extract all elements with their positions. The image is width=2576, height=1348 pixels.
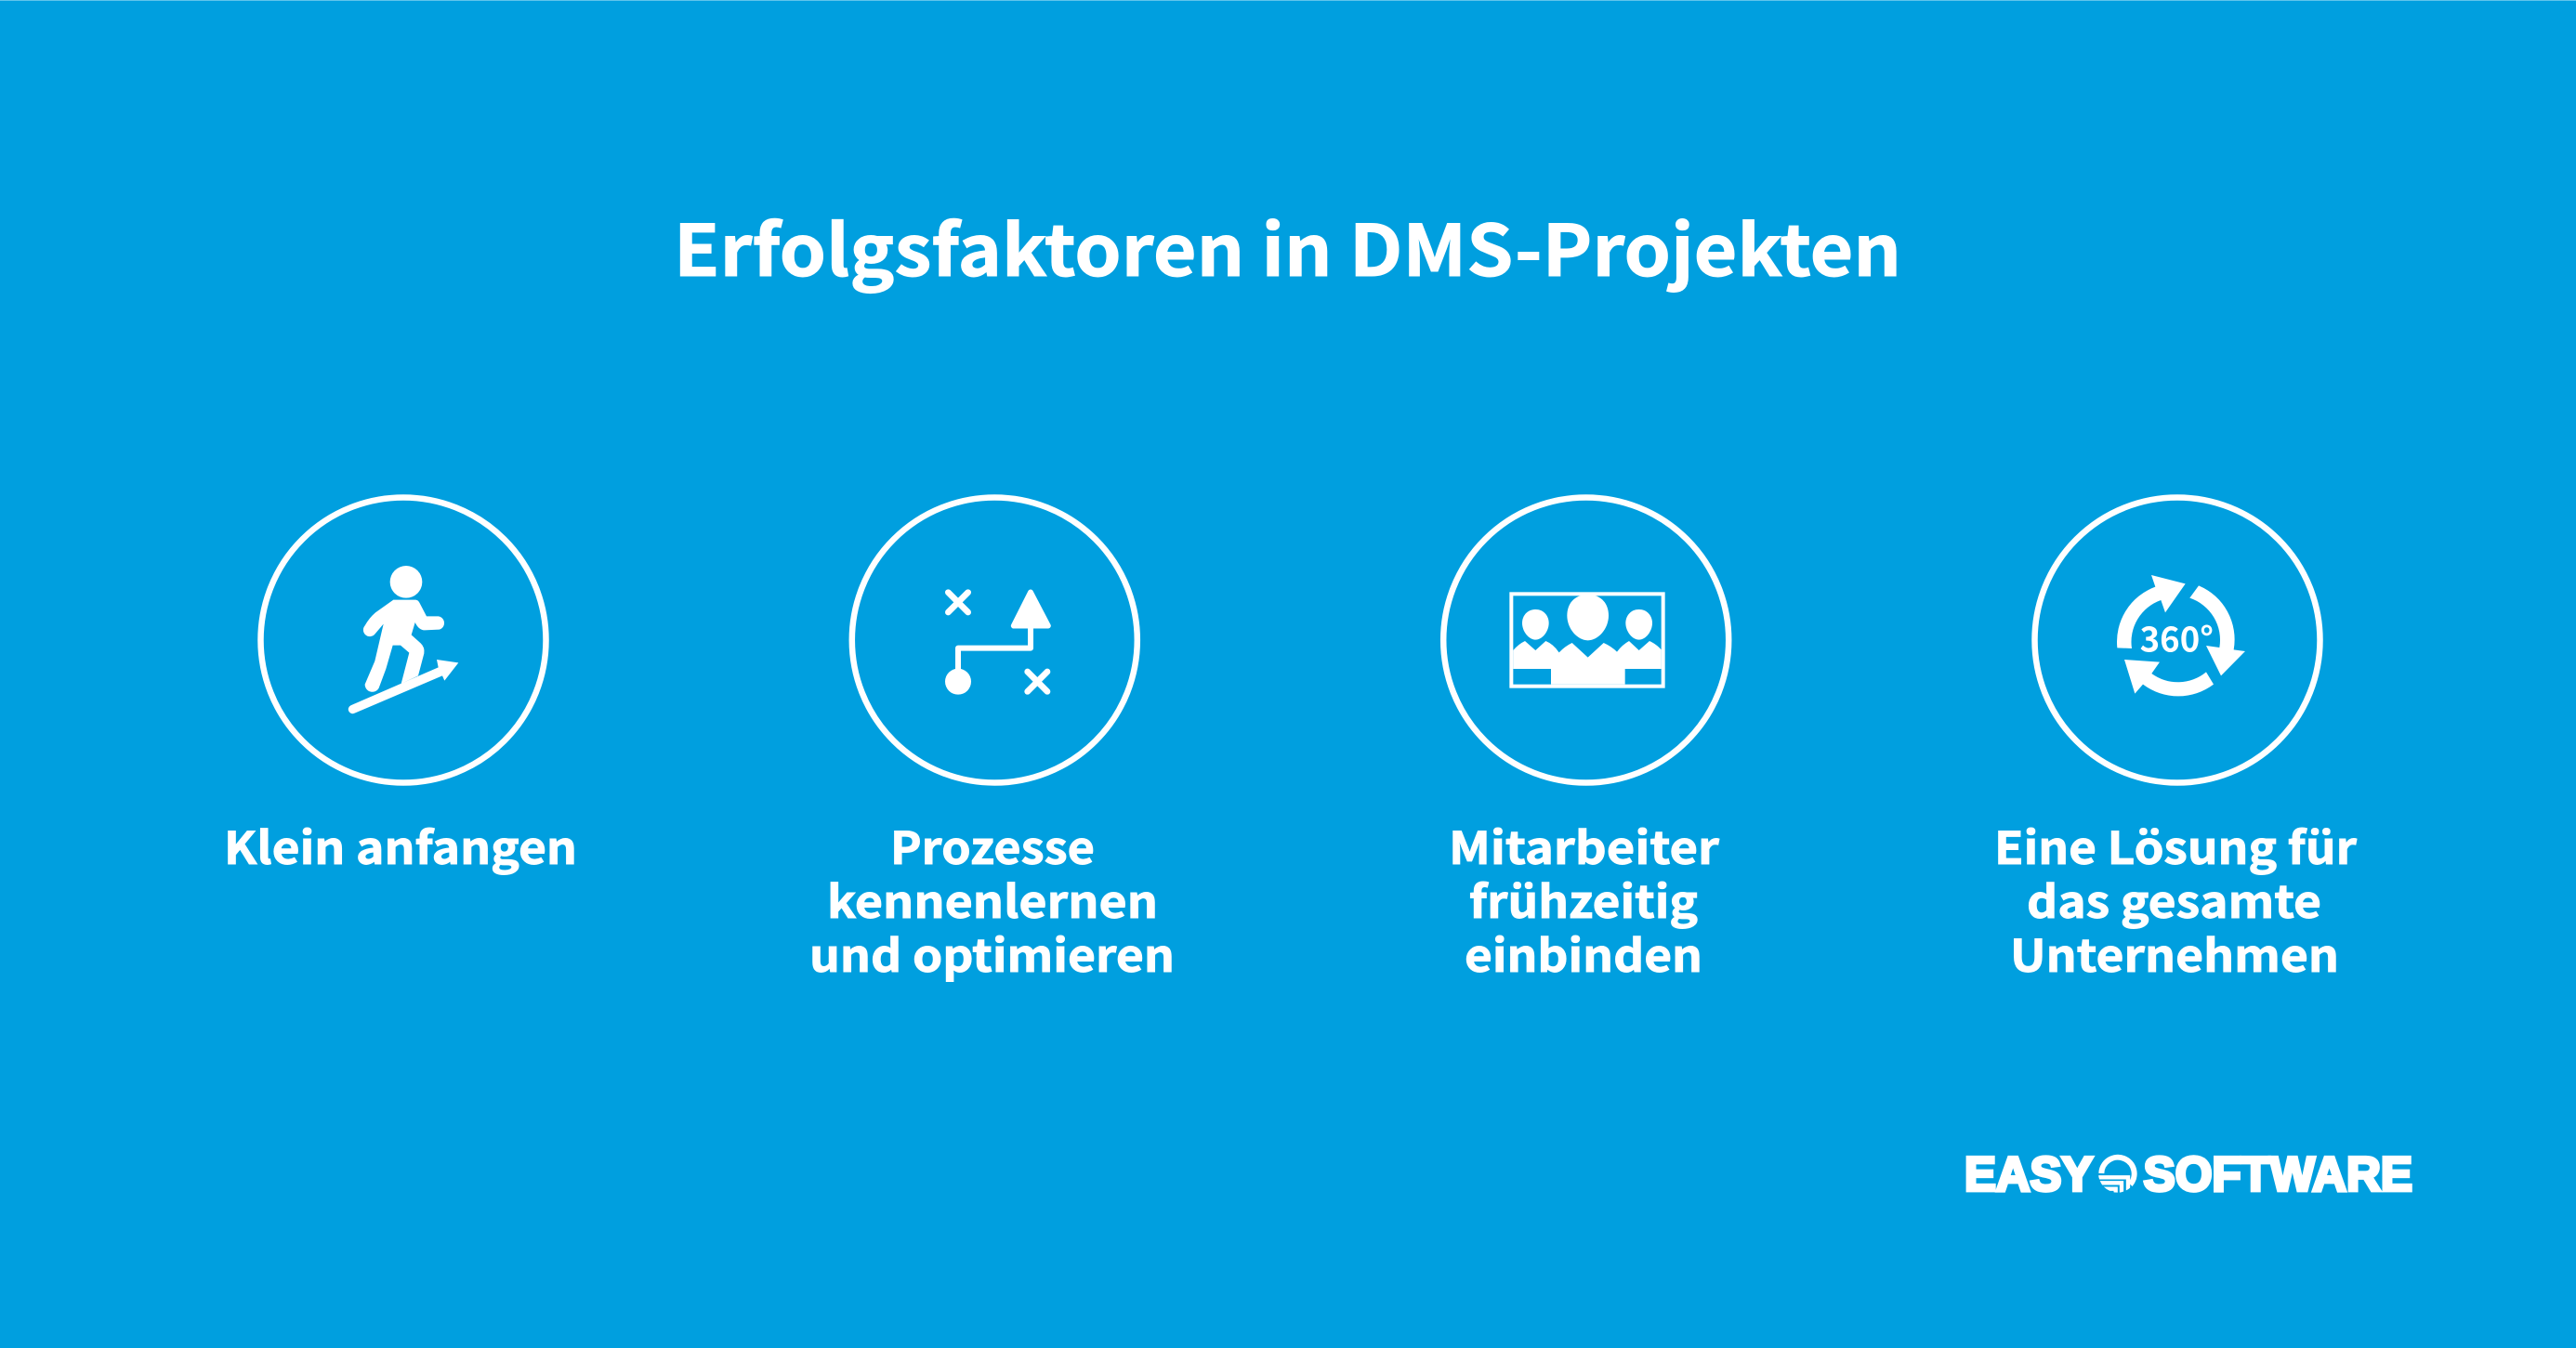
label: Klein anfangen: [224, 812, 577, 877]
panel: Klein anfangen: [224, 498, 577, 877]
panel: Mitarbeiter frühzeitig einbinden: [1443, 498, 1728, 985]
icon circle: process path: [852, 498, 1137, 782]
label: einbinden: [1465, 920, 1702, 985]
label: [1449, 812, 1719, 985]
logo: EASY SOFTWARE: [1966, 1154, 2412, 1193]
logo: EASY SOFTWARE: SOFTWARE: [2144, 1147, 2412, 1201]
icon: person walking up an arrow: [348, 566, 458, 713]
icon circle: team: [1443, 498, 1728, 782]
label: Unternehmen: [2010, 920, 2339, 985]
label: und optimieren: [809, 920, 1175, 985]
icon circle: climbing person: [260, 498, 546, 782]
icon: circular arrows with 360°: 360°: [2140, 611, 2214, 661]
logo: EASY SOFTWARE: EASY: [1965, 1147, 2093, 1201]
icon: three people in a frame: [1511, 594, 1663, 687]
label: [809, 812, 1175, 985]
panel: Eine Lösung für das gesamte Unternehmen: [1994, 498, 2357, 985]
label: [1994, 812, 2357, 985]
label: Prozesse: [890, 812, 1095, 877]
label: Mitarbeiter: [1449, 812, 1719, 877]
label: frühzeitig: [1469, 866, 1698, 931]
label: Eine Lösung für: [1994, 812, 2357, 877]
panel: Prozesse kennenlernen und optimieren: [809, 498, 1175, 985]
icon: path with crosses and arrow: [945, 592, 1048, 695]
label: das gesamte: [2027, 866, 2321, 931]
title: Erfolgsfaktoren in DMS-Projekten: [674, 194, 1901, 296]
icon: circular arrows with 360°: [2117, 575, 2245, 696]
logo mark: [2097, 1158, 2135, 1194]
icon circle: 360 degrees: [2035, 498, 2320, 782]
label: kennenlernen: [827, 866, 1158, 931]
